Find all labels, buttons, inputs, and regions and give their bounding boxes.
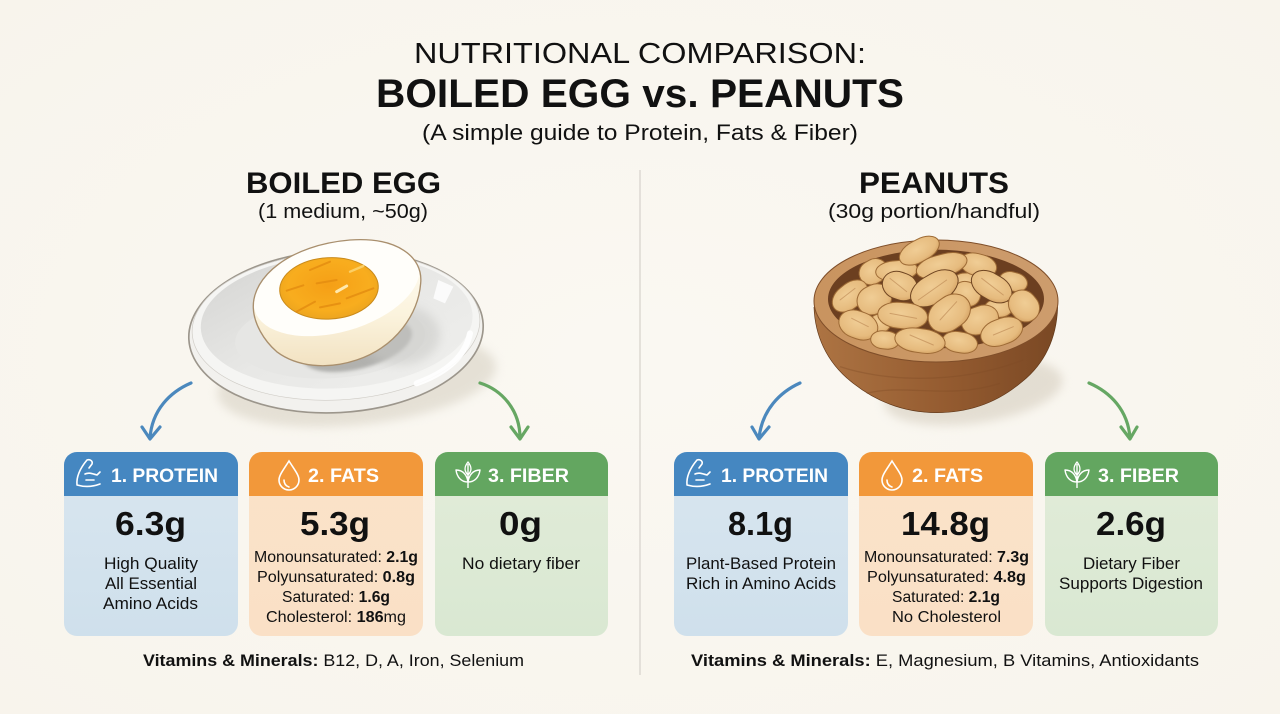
icon: leaf sprout [456, 462, 480, 488]
card: fats [859, 452, 1033, 636]
card: protein: 1. PROTEIN [111, 465, 218, 487]
title: (A simple guide to Protein, Fats & Fiber) [422, 120, 858, 145]
icon: drop [279, 461, 299, 490]
card: fats: 14.8g [901, 505, 990, 542]
heading: peanuts: (30g portion/handful) [828, 201, 1040, 223]
vitamins and minerals: peanuts: Vitamins & Minerals: E, Magnesium, B Vitamins, Antioxidants [691, 651, 1199, 670]
icon: drop [882, 461, 902, 490]
title: BOILED EGG vs. PEANUTS [376, 72, 904, 116]
card: fiber: Dietary Fiber [1083, 555, 1181, 573]
card: fiber: 3. FIBER [1098, 465, 1179, 487]
arrow: to fiber [1089, 383, 1137, 439]
panel: peanuts [674, 167, 1218, 670]
card: fiber: 3. FIBER [488, 465, 569, 487]
card: protein [674, 452, 848, 636]
card: fats: Cholesterol: 186mg [266, 609, 406, 626]
card: protein: 6.3g [115, 505, 186, 542]
title [376, 38, 904, 145]
heading: boiled egg [246, 167, 441, 223]
illustration: boiled egg on plate [188, 239, 498, 430]
card: fats: Monounsaturated: 7.3g [864, 549, 1029, 566]
title: NUTRITIONAL COMPARISON: [414, 38, 866, 70]
heading: boiled egg: BOILED EGG [246, 167, 441, 200]
heading: boiled egg: (1 medium, ~50g) [258, 201, 428, 223]
card: fiber: 0g [499, 505, 542, 542]
card: protein [64, 452, 238, 636]
card: fats: Polyunsaturated: 4.8g [867, 569, 1026, 586]
icon: flexed arm [77, 460, 100, 486]
arrow: to protein [142, 383, 191, 439]
heading: peanuts [828, 167, 1040, 223]
card: protein: High Quality [104, 555, 199, 573]
card: fats: Saturated: 2.1g [892, 589, 1000, 606]
card: fats: 5.3g [300, 505, 370, 542]
card: fats: No Cholesterol [892, 609, 1001, 626]
card: protein: Rich in Amino Acids [686, 575, 836, 593]
arrow: to protein [752, 383, 800, 439]
card: fats: Polyunsaturated: 0.8g [257, 569, 415, 586]
card: fats: Monounsaturated: 2.1g [254, 549, 418, 566]
card: fats [249, 452, 423, 636]
card: protein: Plant-Based Protein [686, 555, 836, 573]
card: fiber: Supports Digestion [1059, 575, 1203, 593]
icon: flexed arm [687, 460, 710, 486]
heading: peanuts: PEANUTS [859, 167, 1009, 200]
icon: leaf sprout [1065, 462, 1089, 488]
card: fats: 2. FATS [912, 465, 983, 487]
arrow: to fiber [480, 383, 528, 439]
card: fiber: No dietary fiber [462, 555, 581, 573]
card: fats: 2. FATS [308, 465, 379, 487]
vitamins and minerals: egg: Vitamins & Minerals: B12, D, A, Iron, Selenium [143, 651, 524, 670]
illustration: bowl of peanuts [814, 231, 1067, 436]
card: protein: Amino Acids [103, 595, 198, 613]
panel: boiled egg [64, 167, 608, 670]
card: protein: 8.1g [728, 505, 793, 542]
card: protein: 1. PROTEIN [721, 465, 828, 487]
card: fiber: 2.6g [1096, 505, 1166, 542]
card: fats: Saturated: 1.6g [282, 589, 390, 606]
card: fiber [435, 452, 608, 636]
card: protein: All Essential [105, 575, 197, 593]
card: fiber [1045, 452, 1218, 636]
